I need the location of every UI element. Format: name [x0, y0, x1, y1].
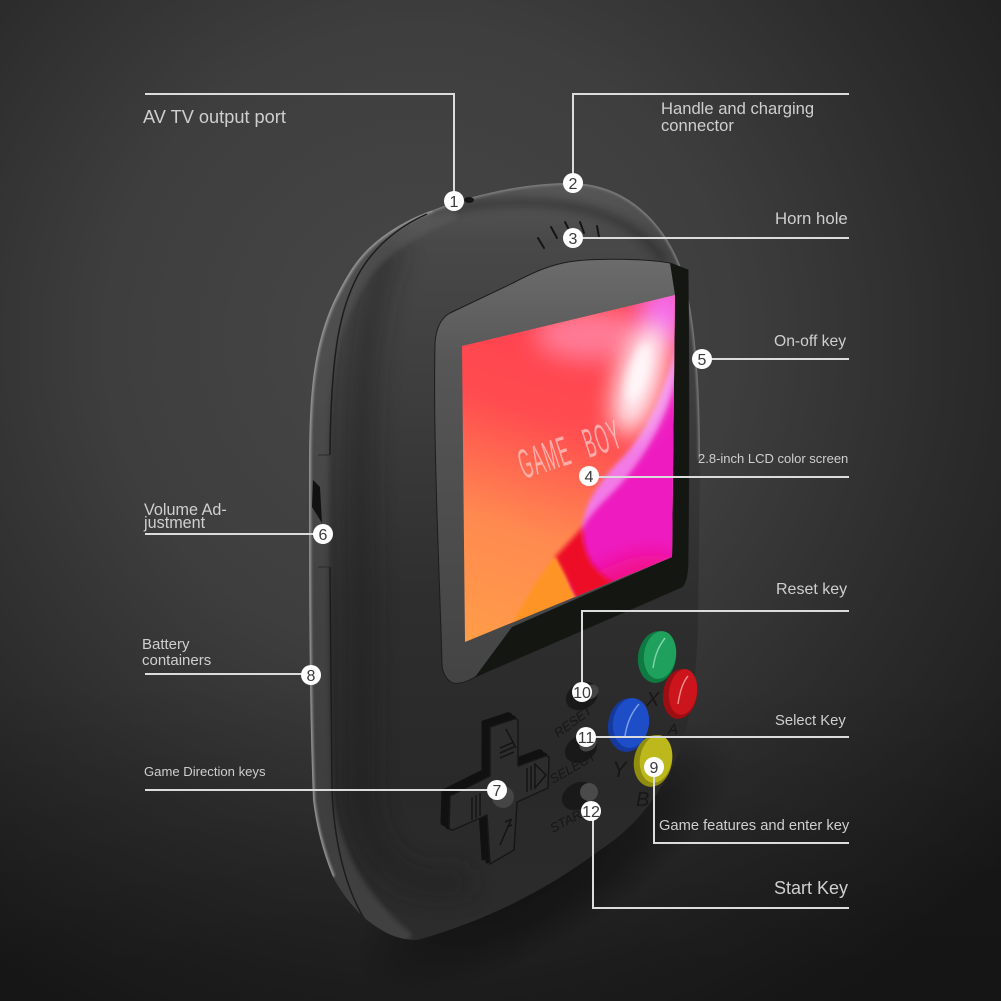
labels: On-off key	[774, 333, 846, 350]
number badges: 6	[319, 527, 328, 544]
labels: Game features and enter key	[659, 818, 850, 834]
labels: Reset key	[776, 581, 847, 598]
number badges: 2	[569, 176, 578, 193]
labels: Game Direction keys	[144, 764, 266, 779]
small buttons	[547, 676, 603, 836]
labels	[142, 99, 850, 898]
volume wheel	[312, 480, 322, 523]
leader lines	[145, 94, 849, 908]
button Y blue	[604, 695, 652, 782]
small buttons: SELECT	[547, 748, 599, 787]
button X green	[635, 629, 679, 711]
button X green: X	[645, 689, 660, 711]
button Y blue: Y	[612, 757, 628, 782]
button B yellow: B	[636, 789, 649, 811]
screen	[462, 295, 675, 642]
labels: AV TV output port	[143, 107, 286, 127]
console body	[309, 183, 700, 950]
labels: Horn hole	[775, 209, 848, 228]
number badges: 12	[582, 804, 600, 821]
speaker holes	[538, 222, 599, 248]
button A red	[660, 667, 700, 738]
labels: Handle and charging	[661, 99, 814, 118]
floor darkening	[0, 680, 1001, 1001]
inner dark band	[348, 250, 401, 530]
number badges	[301, 173, 712, 821]
number badges: 1	[450, 194, 459, 211]
number badges: 9	[650, 760, 659, 777]
screen label: GAME BOY	[512, 410, 627, 488]
labels: Start Key	[774, 878, 848, 898]
bezel black glass	[475, 263, 689, 677]
small buttons: START	[547, 802, 592, 836]
left rim band	[309, 200, 450, 950]
number badges: 8	[307, 668, 316, 685]
highlight	[639, 278, 691, 346]
labels: Volume Ad-	[144, 501, 227, 519]
labels: justment	[143, 514, 206, 532]
number badges: 3	[569, 231, 578, 248]
red wedge	[555, 527, 620, 600]
d-pad	[442, 714, 549, 864]
number badges: 5	[698, 352, 707, 369]
number badges: 7	[493, 783, 502, 800]
orange wedge	[512, 557, 577, 623]
groove	[330, 214, 427, 455]
number badges: 4	[585, 469, 594, 486]
AV port	[464, 197, 474, 203]
button B yellow	[630, 732, 676, 811]
labels: Select Key	[775, 713, 846, 729]
labels: connector	[661, 116, 734, 135]
button A red: A	[667, 721, 678, 738]
device shadow	[316, 676, 774, 1001]
screen bezel	[435, 259, 689, 683]
small buttons: RESET	[551, 702, 596, 740]
number badges: 10	[573, 685, 591, 702]
labels: Battery	[142, 636, 190, 653]
labels: 2.8-inch LCD color screen	[698, 451, 848, 466]
labels: containers	[142, 652, 211, 669]
number badges: 11	[578, 730, 594, 747]
magenta sweep	[563, 345, 674, 602]
